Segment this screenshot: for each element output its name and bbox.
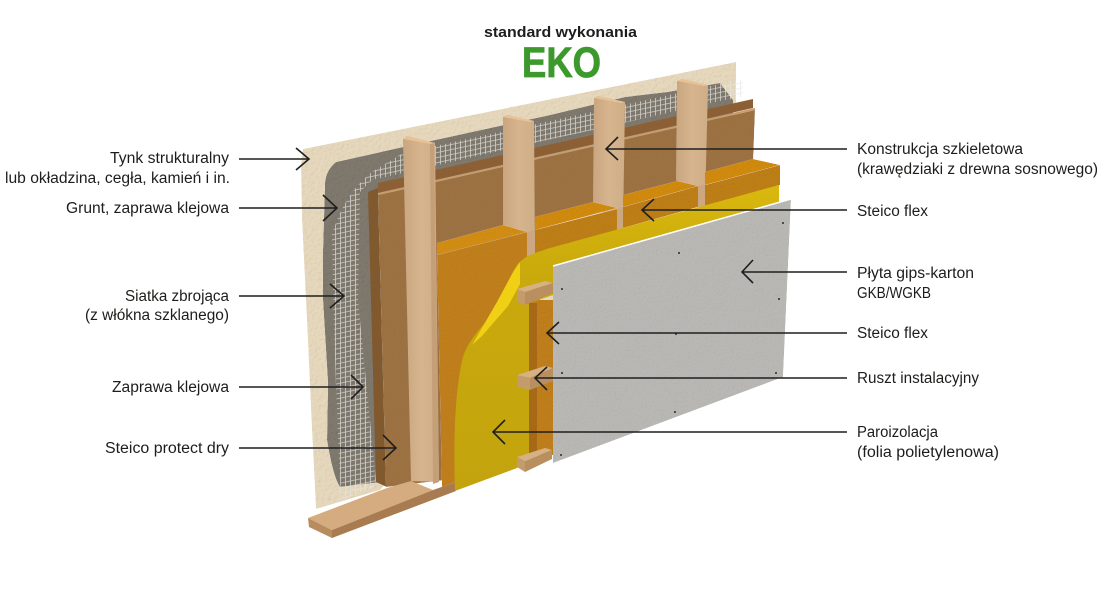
label: plasterboard: GKB/WGKB bbox=[857, 285, 931, 302]
label: plasterboard: Płyta gips-karton bbox=[857, 265, 974, 282]
subtitle: standard wykonania bbox=[484, 24, 638, 41]
layer: Steico protect dry board bbox=[368, 99, 755, 487]
wall cross-section illustration bbox=[301, 62, 791, 538]
label: vapour barrier: Paroizolacja bbox=[857, 424, 938, 441]
heading: EKO: EKO bbox=[522, 39, 601, 87]
arrow: installation frame bbox=[535, 367, 847, 390]
label: Steico flex lower: Steico flex bbox=[857, 325, 928, 342]
arrow: Steico flex upper bbox=[642, 199, 847, 221]
label: Steico protect dry: Steico protect dry bbox=[105, 440, 229, 457]
label: installation frame: Ruszt instalacyjny bbox=[857, 370, 979, 387]
layer: grey adhesive mortar bbox=[323, 83, 733, 487]
label: primer: Grunt, zaprawa klejowa bbox=[66, 200, 229, 217]
film: folded flap bbox=[472, 262, 520, 345]
bottom plate bbox=[308, 481, 456, 538]
arrow: plaster bbox=[239, 148, 309, 170]
layer: gypsum plasterboard bbox=[553, 199, 791, 463]
label: frame: (krawędziaki z drewna sosnowego) bbox=[857, 161, 1098, 178]
layer: reinforcing fiberglass mesh bbox=[332, 79, 743, 500]
label: frame: Konstrukcja szkieletowa bbox=[857, 141, 1023, 158]
label: plaster: Tynk strukturalny bbox=[110, 150, 229, 167]
label: plaster bbox=[5, 150, 230, 187]
label: Steico flex upper: Steico flex bbox=[857, 203, 928, 220]
arrow: frame bbox=[606, 137, 847, 160]
label: mesh bbox=[85, 288, 229, 324]
layer: vapour barrier film bbox=[454, 185, 779, 491]
layer: structural plaster bbox=[301, 62, 736, 509]
arrow: vapour barrier bbox=[493, 420, 847, 444]
label: plaster: lub okładzina, cegła, kamień i in. bbox=[5, 170, 230, 187]
arrow: mesh bbox=[239, 284, 344, 308]
board screws bbox=[560, 222, 784, 456]
label: vapour barrier: (folia polietylenowa) bbox=[857, 444, 999, 461]
studs: back timber frame bbox=[503, 79, 708, 257]
battens: installation frame bbox=[517, 281, 553, 472]
label: plasterboard bbox=[857, 265, 974, 302]
arrow: plasterboard bbox=[742, 260, 847, 283]
stud: front timber bbox=[403, 136, 439, 484]
label: mesh: (z włókna szklanego) bbox=[85, 307, 229, 324]
stud sides passing through insulation bbox=[527, 184, 705, 259]
arrow: Steico protect dry bbox=[239, 435, 396, 460]
arrow: adhesive mortar bbox=[239, 375, 363, 399]
arrow: Steico flex lower bbox=[547, 322, 847, 344]
layer: Steico flex insulation bbox=[437, 159, 780, 487]
label: mesh: Siatka zbrojąca bbox=[125, 288, 229, 305]
title bbox=[484, 24, 638, 87]
arrow: primer bbox=[239, 195, 337, 221]
label: vapour barrier bbox=[857, 424, 999, 461]
label: frame bbox=[857, 141, 1098, 178]
label: adhesive mortar: Zaprawa klejowa bbox=[112, 379, 229, 396]
